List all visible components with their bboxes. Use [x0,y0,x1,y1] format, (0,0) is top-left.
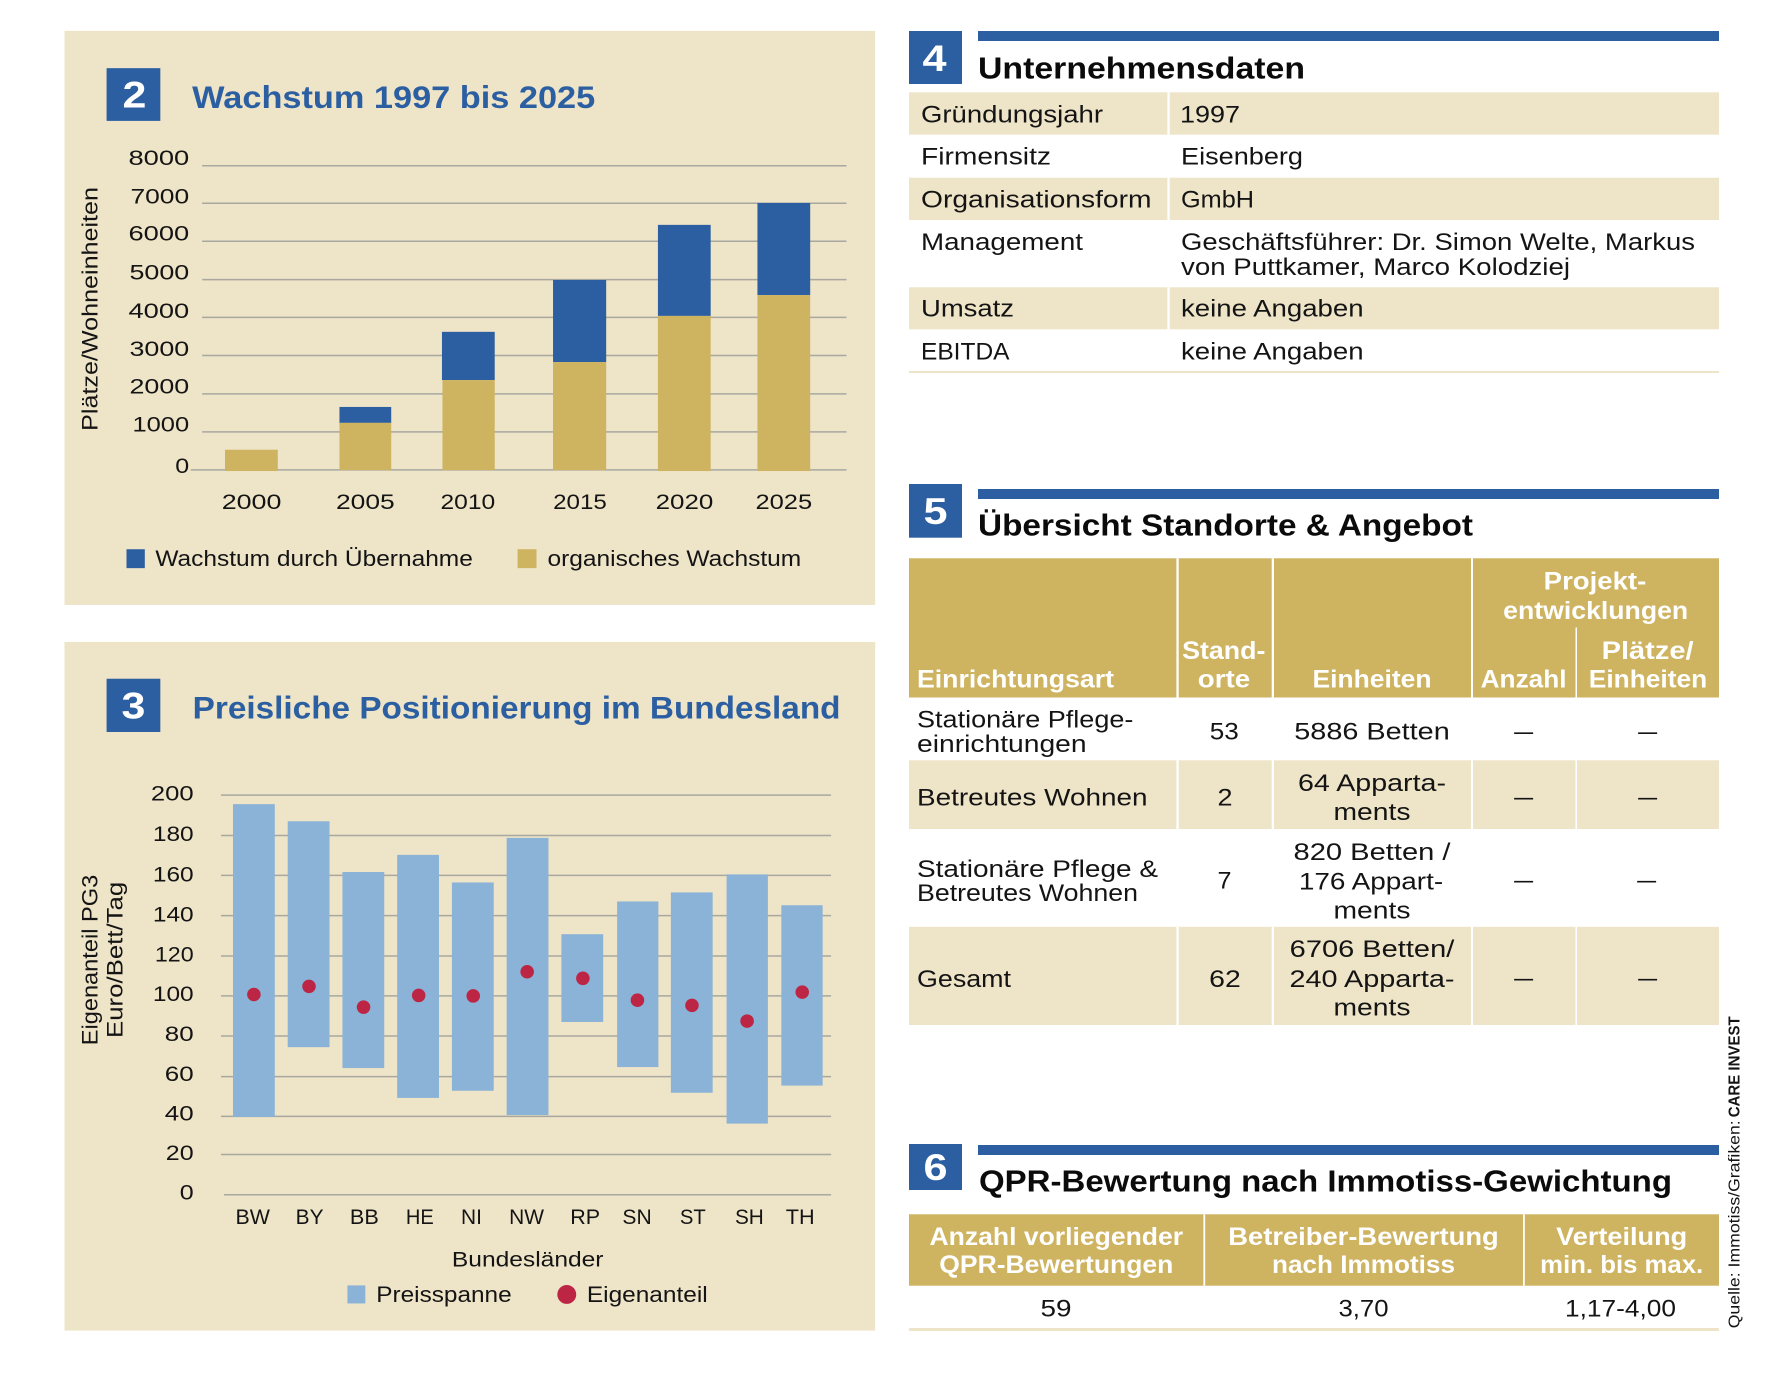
x axis labels [222,491,812,514]
row: Gesamt: — [1638,965,1657,992]
x axis labels: ST [680,1206,706,1229]
table header [909,558,1719,698]
y axis labels: 6000 [128,222,189,245]
bar 2020 [658,225,711,471]
Eigenanteil dots [247,965,809,1028]
y axis title: Plätze/Wohneinheiten [78,187,103,431]
legend: Eigenanteil [587,1282,708,1307]
source credit: Quelle: Immotiss/Grafiken: [1726,1120,1744,1328]
table header [909,1214,1719,1286]
row: Management: Geschäftsführer: Dr. Simon Welte, Markus [1181,229,1695,256]
badge 6: 6 [924,1147,948,1188]
table header: Stand- [1182,637,1266,665]
table values: 3,70 [1338,1296,1388,1323]
heading: Preisliche Positionierung: Preisliche Positionierung im Bundesland [193,690,841,726]
y axis labels: 3000 [129,338,189,361]
y axis labels: 140 [153,903,194,926]
row: Firmensitz: Firmensitz [921,144,1051,171]
bar 2010 [442,332,495,470]
x axis labels: 2000 [222,491,281,514]
table values: 59 [1040,1296,1072,1323]
y axis labels: 7000 [130,185,189,208]
table header: orte [1198,666,1250,694]
row: Management: Management [921,229,1083,256]
badge 4: 4 [922,38,947,79]
table header: Einheiten [1589,666,1707,694]
heading: QPR-Bewertung nach Immotiss-Gewichtung: QPR-Bewertung nach Immotiss-Gewichtung [979,1164,1672,1199]
row: Gesamt [909,927,1719,1025]
badge 5: 5 [924,491,948,532]
y axis labels: 1000 [132,413,189,436]
row: Betreutes Wohnen: 2 [1218,784,1232,811]
row: Betreutes Wohnen [909,760,1719,829]
x axis labels: BY [296,1206,324,1229]
legend: Preisspanne [376,1282,512,1307]
x axis labels: SN [622,1206,652,1229]
source credit [1726,1016,1744,1328]
y axis labels: 4000 [128,300,189,323]
badge 5 [909,484,962,538]
y axis labels: 40 [165,1103,194,1126]
table header: Anzahl vorliegender [930,1223,1183,1251]
row: Organisationsform: Organisationsform [921,186,1152,213]
row: Stationäre Pflegeeinrichtungen: einrichtungen [917,731,1087,758]
badge 6 [909,1144,962,1190]
row: Stationäre Pflege & Betreutes Wohnen: 7 [1218,868,1232,895]
row: Betreutes Wohnen: ments [1334,799,1410,826]
y axis title: Euro/Bett/Tag [103,882,128,1038]
row: Umsatz: Umsatz [921,296,1014,323]
row: EBITDA: keine Angaben [1181,338,1364,365]
row: Organisationsform: GmbH [1181,186,1254,213]
price range bars [233,804,823,1124]
row: Gesamt: 62 [1209,966,1241,993]
table header: Projekt- [1544,568,1646,596]
row: Stationäre Pflegeeinrichtungen: — [1514,719,1533,746]
row: Firmensitz: Eisenberg [1181,144,1303,171]
legend [126,546,801,571]
table values [909,1296,1719,1331]
grid lines [191,166,847,470]
row: Gründungsjahr: 1997 [1180,102,1240,129]
x axis title: Bundesländer [452,1248,604,1271]
row: Stationäre Pflege & Betreutes Wohnen: Stationäre Pflege & [917,856,1158,883]
table header: Betreiber-Bewertung [1228,1223,1499,1251]
panel: Wachstum 1997 bis 2025 [64,31,875,605]
y axis labels [128,147,189,478]
badge 4 [909,31,962,84]
row: Firmensitz [921,144,1303,171]
row: Betreutes Wohnen: — [1514,784,1533,811]
row: Betreutes Wohnen: 64 Apparta- [1298,770,1446,797]
y axis labels: 2000 [129,376,189,399]
section 5: Übersicht Standorte und Angebot [909,484,1719,1025]
y axis labels: 200 [151,783,194,806]
badge 3 [107,679,160,732]
x axis labels: HE [406,1206,434,1229]
table header: Einrichtungsart [917,666,1115,694]
table header: Anzahl [1481,666,1567,694]
table header: nach Immotiss [1272,1251,1455,1279]
heading: Unternehmensdaten: Unternehmensdaten [978,50,1305,85]
badge 2: 2 [123,74,146,115]
row: Betreutes Wohnen: — [1638,784,1657,811]
heading bar [978,489,1719,499]
table header: Verteilung [1556,1223,1687,1251]
x axis labels: BW [235,1206,270,1229]
x axis labels: 2015 [553,491,607,514]
row: Management: von Puttkamer, Marco Kolodziej [1181,254,1570,281]
source credit: CARE INVEST [1726,1016,1744,1117]
x axis labels: BB [350,1206,379,1229]
row: Gesamt: 240 Apparta- [1290,966,1454,993]
row: Stationäre Pflege & Betreutes Wohnen: 820 Betten / [1294,839,1451,866]
section 6: QPR-Bewertung [909,1144,1719,1331]
bar 2015 [553,280,606,470]
row: Stationäre Pflege & Betreutes Wohnen [917,839,1656,924]
y axis labels: 60 [165,1063,194,1086]
x axis labels: NI [461,1206,482,1229]
bar 2025 [757,203,810,471]
heading bar [978,1145,1719,1155]
y axis labels: 180 [153,823,194,846]
y axis labels [151,783,194,1205]
bar 2000 [225,450,278,471]
row: Stationäre Pflegeeinrichtungen: Stationäre Pflege- [917,706,1133,734]
row: Stationäre Pflegeeinrichtungen [917,706,1657,758]
row: Gesamt: ments [1334,995,1410,1022]
y axis labels: 160 [153,863,194,886]
y axis labels: 80 [165,1023,194,1046]
x axis labels: TH [786,1206,815,1229]
panel: Preisliche Positionierung im Bundesland [64,642,875,1331]
table values: 1,17-4,00 [1565,1296,1676,1323]
y axis labels: 5000 [129,262,189,285]
row: EBITDA [909,338,1719,373]
row: Stationäre Pflege & Betreutes Wohnen: — [1514,867,1533,894]
row: Management [921,229,1695,281]
row: Stationäre Pflege & Betreutes Wohnen: Betreutes Wohnen [917,880,1138,907]
section 4: Unternehmensdaten [909,31,1719,373]
row: Organisationsform [909,178,1719,220]
x axis labels: 2010 [440,491,495,514]
row: EBITDA: EBITDA [921,338,1010,365]
row: Gründungsjahr: Gründungsjahr [921,102,1103,129]
legend [347,1282,708,1307]
table header: Plätze/ [1602,637,1694,665]
y axis labels: 120 [155,943,194,966]
row: Umsatz: keine Angaben [1181,296,1364,323]
y axis labels: 0 [175,455,189,478]
legend: organisches Wachstum [547,546,801,571]
y axis labels: 20 [166,1142,194,1165]
table header: Einheiten [1312,666,1432,694]
y axis labels: 0 [180,1182,194,1205]
row: Gründungsjahr [909,92,1719,135]
x axis labels: 2005 [336,491,395,514]
row: Gesamt: — [1514,965,1533,992]
row: Gesamt: Gesamt [917,966,1011,993]
y axis labels: 100 [153,983,194,1006]
table header: entwicklungen [1503,597,1688,625]
stacked bar chart [225,203,810,471]
bar 2005 [339,407,391,470]
row: Betreutes Wohnen: Betreutes Wohnen [917,784,1148,811]
x axis labels [235,1206,815,1229]
y axis title [78,875,128,1045]
grid lines [221,795,831,1195]
y axis title: Eigenanteil PG3 [78,875,103,1045]
heading: Wachstum 1997 bis 2025: Wachstum 1997 bis 2025 [192,79,595,115]
row: Stationäre Pflegeeinrichtungen: — [1638,719,1657,746]
row: Stationäre Pflege & Betreutes Wohnen: — [1637,867,1656,894]
heading: Übersicht Standorte & Angebot: Übersicht Standorte & Angebot [978,508,1473,543]
row: Gesamt: 6706 Betten/ [1290,936,1455,963]
table header: min. bis max. [1540,1251,1703,1279]
badge 2 [107,68,160,121]
y axis labels: 8000 [128,147,189,170]
heading bar [978,31,1719,41]
row: Stationäre Pflege & Betreutes Wohnen: ments [1334,897,1410,924]
row: Stationäre Pflegeeinrichtungen: 53 [1210,719,1239,746]
x axis labels: 2025 [755,491,812,514]
row: Umsatz [909,287,1719,329]
badge 3: 3 [122,686,145,727]
table header: QPR-Bewertungen [939,1251,1173,1279]
x axis labels: NW [509,1206,544,1229]
row: Stationäre Pflege & Betreutes Wohnen: 176 Appart- [1299,868,1443,895]
legend: Wachstum durch Übernahme [155,546,473,571]
row: Stationäre Pflegeeinrichtungen: 5886 Betten [1294,719,1450,746]
x axis labels: RP [570,1206,600,1229]
x axis labels: SH [735,1206,764,1229]
x axis labels: 2020 [656,491,713,514]
